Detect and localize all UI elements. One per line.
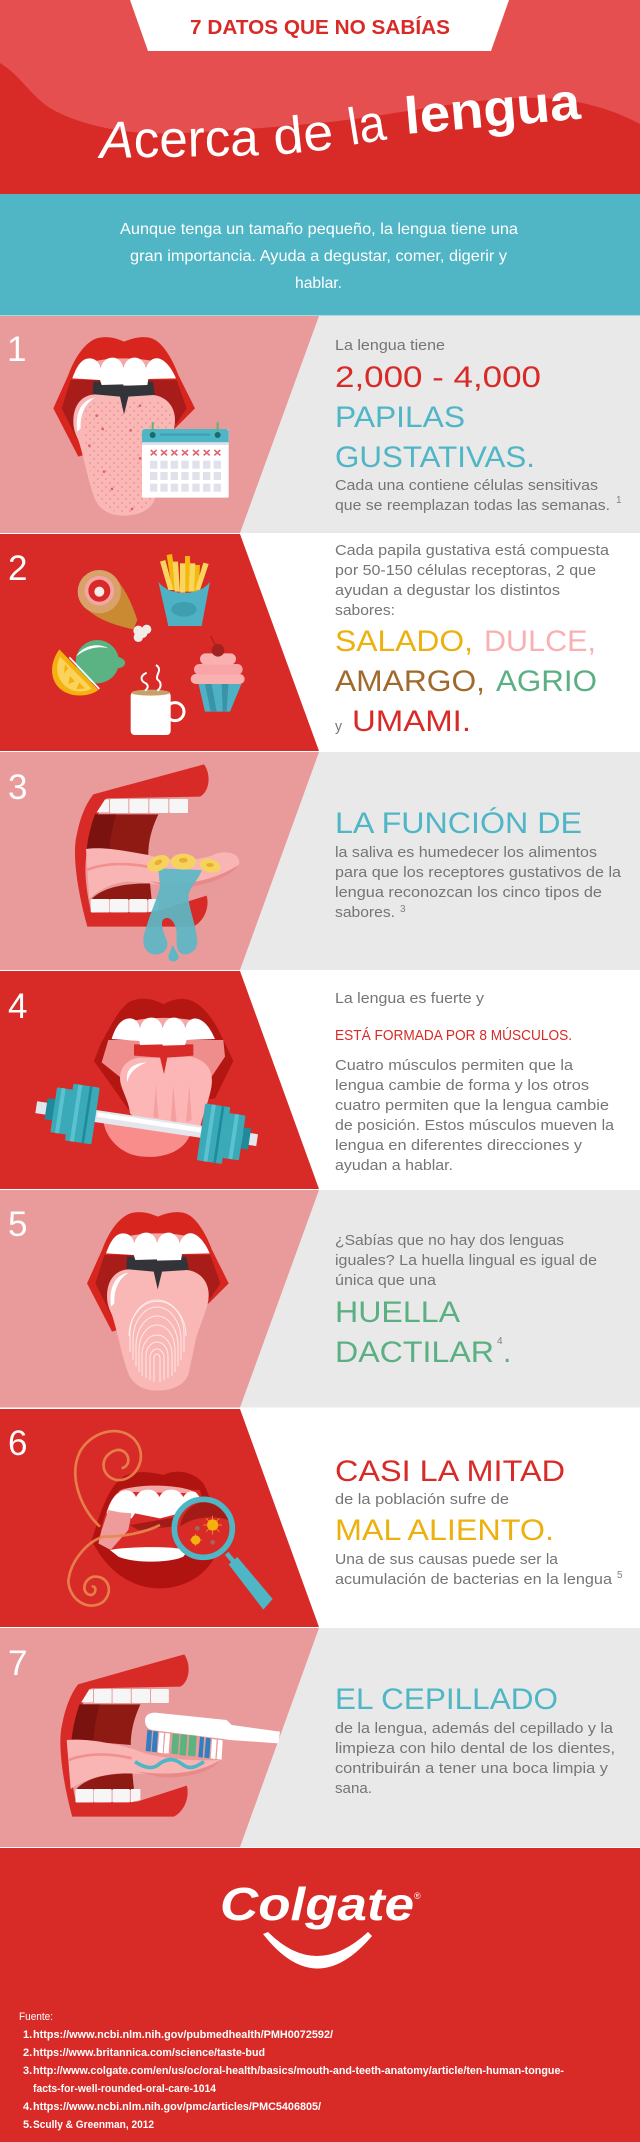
panel: fact 2: [0, 534, 610, 751]
sources: https://www.britannica.com/science/taste-bud: [33, 2047, 265, 2059]
panel: fact 6: [0, 1409, 623, 1627]
icon: dumbbell: [32, 1079, 261, 1169]
text: fact 4: ESTÁ FORMADA POR 8 MÚSCULOS.: [335, 1027, 572, 1044]
text: fact 1: GUSTATIVAS.: [335, 441, 535, 474]
text: fact 2: AGRIO: [496, 665, 597, 698]
smell swirls: [68, 1431, 160, 1606]
text: fact 6: 5: [617, 1570, 623, 1581]
text: fact 5: única que una: [335, 1272, 437, 1289]
text: fact 1: PAPILAS: [335, 401, 465, 434]
number 6: 6: [8, 1424, 27, 1463]
text: fact 5: 4: [497, 1336, 503, 1347]
text: fact 1: que se reemplazan todas las semanas.: [335, 497, 610, 514]
text: fact 1: [335, 337, 622, 514]
main title: la: [344, 94, 389, 157]
icon: fries: [158, 554, 210, 626]
text: fact 3: la saliva es humedecer los alimentos: [335, 844, 597, 861]
text: fact 1: 2,000 - 4,000: [335, 361, 541, 394]
number 7: 7: [8, 1644, 27, 1683]
sources: 2.: [23, 2047, 32, 2059]
text: fact 4: de posición. Estos músculos mueven la: [335, 1117, 615, 1134]
text: fact 4: lengua en diferentes direcciones y: [335, 1137, 583, 1154]
text: fact 2: UMAMI.: [352, 705, 471, 738]
text: fact 2: DULCE,: [484, 625, 596, 658]
text: fact 1: La lengua tiene: [335, 337, 445, 354]
intro panel: hablar.: [295, 275, 342, 292]
icon: lime and orange: [52, 640, 125, 696]
intro panel: Aunque tenga un tamaño pequeño, la lengua tiene una: [120, 221, 518, 238]
text: fact 5: [335, 1232, 597, 1369]
panel: fact 5: [0, 1190, 640, 1408]
text: fact 3: sabores.: [335, 904, 395, 921]
illustration: bad breath and magnifier: [68, 1431, 273, 1610]
text: fact 2: Cada papila gustativa está compuesta: [335, 542, 610, 559]
icon: ham: [78, 570, 151, 642]
header banner: [0, 0, 640, 194]
number 3: 3: [8, 768, 27, 807]
text: fact 4: La lengua es fuerte y: [335, 990, 485, 1007]
text: fact 2: y: [335, 718, 342, 735]
sources: facts-for-well-rounded-oral-care-1014: [33, 2083, 217, 2095]
sources: 5.: [23, 2119, 32, 2131]
sources: Scully & Greenman, 2012: [33, 2119, 154, 2131]
main title: lengua: [402, 73, 584, 146]
illustration: mouth with saliva: [75, 764, 239, 962]
text: fact 7: EL CEPILLADO: [335, 1683, 558, 1716]
sources: 3.: [23, 2065, 32, 2077]
text: fact 4: [335, 990, 615, 1174]
text: fact 7: de la lengua, además del cepillado y la: [335, 1720, 614, 1737]
title tab: 7 DATOS QUE NO SABÍAS: [190, 16, 450, 39]
text: fact 1: 1: [616, 495, 622, 506]
illustration: tongue lifting a dumbbell: [32, 999, 261, 1169]
text: fact 6: Una de sus causas puede ser la: [335, 1551, 559, 1568]
text: fact 1: Cada una contiene células sensitivas: [335, 477, 598, 494]
text: fact 3: para que los receptores gustativos de la: [335, 864, 622, 881]
text: fact 4: lengua cambie de forma y los otros: [335, 1077, 589, 1094]
cereal: [145, 852, 222, 875]
text: fact 6: de la población sufre de: [335, 1491, 509, 1508]
text: fact 4: cuatro permiten que la lengua cambie: [335, 1097, 609, 1114]
footer panel: [0, 1848, 640, 2142]
number 5: 5: [8, 1205, 27, 1244]
text: fact 4: ayudan a hablar.: [335, 1157, 453, 1174]
icon: magnifier: [174, 1499, 273, 1610]
panel: fact 3: [0, 752, 640, 970]
text: fact 3: lengua reconozcan los cinco tipos de: [335, 884, 602, 901]
saliva: [143, 868, 202, 954]
text: fact 6: MAL ALIENTO.: [335, 1514, 554, 1547]
text: fact 7: contribuirán a tener una boca limpia y: [335, 1760, 609, 1777]
sources: 4.: [23, 2101, 32, 2113]
illustration: brushing the tongue: [60, 1654, 280, 1817]
text: fact 2: SALADO,: [335, 625, 473, 658]
text: fact 3: [335, 807, 622, 921]
text: fact 2: ayudan a degustar los distintos: [335, 582, 560, 599]
panel: fact 7: [0, 1628, 640, 1847]
text: fact 2: AMARGO,: [335, 665, 485, 698]
logo: Colgate: ®: [414, 1891, 421, 1901]
icon: coffee cup: [131, 665, 184, 735]
icon: toothpaste: [135, 1760, 204, 1768]
icon: calendar: [142, 422, 229, 498]
text: fact 5: iguales? La huella lingual es igual de: [335, 1252, 597, 1269]
text: fact 5: DACTILAR: [335, 1336, 494, 1369]
sources: http://www.colgate.com/en/us/oc/oral-health/basics/mouth-and-teeth-anatomy/article/ten-human-tongue-: [33, 2065, 564, 2077]
text: fact 3: LA FUNCIÓN DE: [335, 807, 582, 840]
logo: Colgate: [220, 1878, 421, 1969]
text: fact 6: [335, 1455, 623, 1588]
sources: https://www.ncbi.nlm.nih.gov/pubmedhealth/PMH0072592/: [33, 2029, 333, 2041]
text: fact 5: .: [503, 1336, 511, 1369]
sources: 1.: [23, 2029, 32, 2041]
text: fact 7: sana.: [335, 1780, 372, 1797]
text: fact 2: por 50-150 células receptoras, 2 que: [335, 562, 596, 579]
number 2: 2: [8, 549, 27, 588]
text: fact 5: ¿Sabías que no hay dos lenguas: [335, 1232, 564, 1249]
text: fact 5: HUELLA: [335, 1296, 460, 1329]
main title: [96, 73, 584, 170]
text: fact 2: sabores:: [335, 602, 395, 619]
main title: Acerca: [96, 109, 259, 170]
text: fact 2: [335, 542, 610, 738]
text: fact 7: limpieza con hilo dental de los dientes,: [335, 1740, 615, 1757]
number 1: 1: [7, 330, 26, 369]
sources: https://www.ncbi.nlm.nih.gov/pmc/articles/PMC5406805/: [33, 2101, 321, 2113]
number 4: 4: [8, 987, 27, 1026]
sources: [19, 2011, 564, 2131]
panel: fact 4: [0, 971, 615, 1189]
icon: fingerprint: [129, 1300, 186, 1382]
text: fact 3: 3: [400, 904, 406, 915]
text: fact 6: acumulación de bacterias en la lengua: [335, 1571, 613, 1588]
title tab: [130, 0, 509, 51]
main title: de: [270, 103, 336, 167]
sources: Fuente:: [19, 2011, 53, 2023]
illustration: tongue with fingerprint: [87, 1212, 229, 1391]
logo: Colgate: Colgate: [220, 1878, 414, 1930]
text: fact 7: [335, 1683, 615, 1797]
text: fact 6: CASI LA MITAD: [335, 1455, 565, 1488]
illustration: foods: [52, 554, 245, 735]
intro panel: gran importancia. Ayuda a degustar, comer, digerir y: [130, 248, 507, 265]
intro panel: [0, 194, 640, 316]
text: fact 4: Cuatro músculos permiten que la: [335, 1057, 574, 1074]
illustration: mouth with papillae and calendar: [53, 337, 229, 516]
icon: toothbrush: [145, 1713, 280, 1760]
icon: cupcake: [191, 636, 245, 712]
panel: fact 1: [0, 316, 640, 533]
